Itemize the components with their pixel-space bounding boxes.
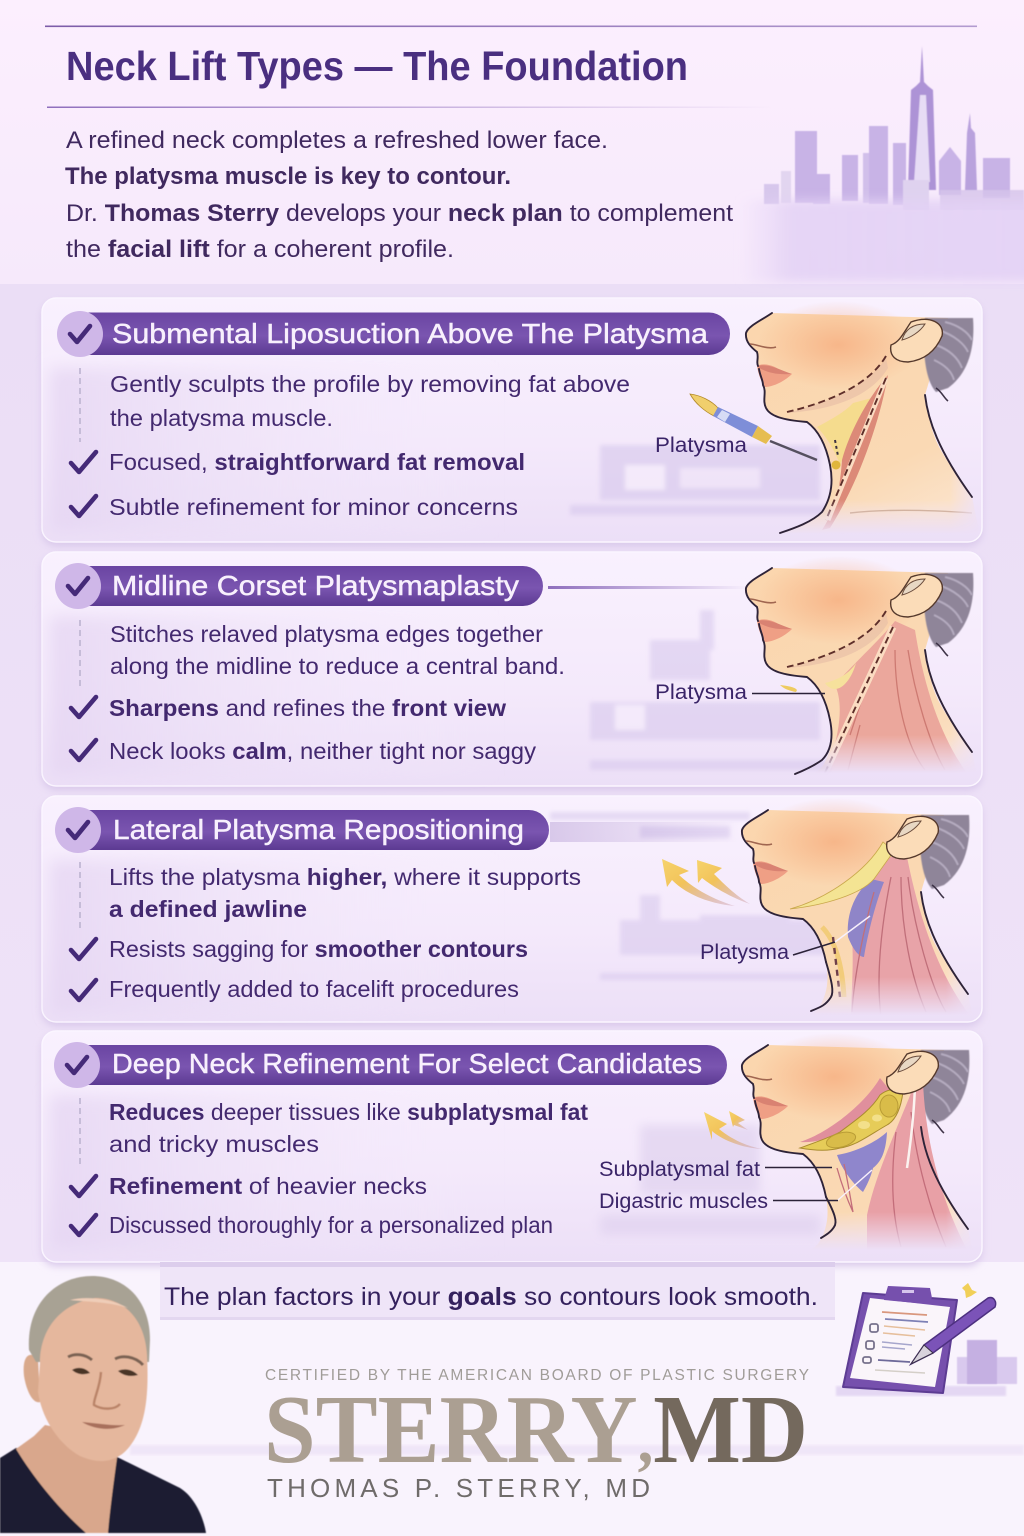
label: subplatysmal fat and digastric muscles bbox=[599, 1158, 872, 1213]
intro text: The platysma muscle is key to contour. bbox=[65, 163, 511, 190]
checklist: Refinement of heavier necks bbox=[109, 1173, 427, 1199]
label: platysma: Platysma bbox=[700, 941, 789, 964]
title: Neck Lift Types — The Foundation bbox=[66, 43, 688, 89]
label: subplatysmal fat and digastric muscles: Subplatysmal fat bbox=[599, 1158, 760, 1181]
logo wordmark: STERRY,MD bbox=[264, 1376, 808, 1484]
panel: submental liposuction bbox=[42, 298, 982, 546]
heading bar: Deep Neck Refinement For Select Candidates bbox=[112, 1048, 702, 1079]
checklist bbox=[71, 936, 528, 1002]
icon: lift arrows bbox=[704, 1111, 762, 1149]
intro text: Dr. Thomas Sterry develops your neck plan to complement bbox=[66, 200, 733, 227]
description: Gently sculpts the profile by removing fat above bbox=[110, 371, 630, 397]
label: subplatysmal fat and digastric muscles: Digastric muscles bbox=[599, 1190, 768, 1213]
checklist: Discussed thoroughly for a personalized plan bbox=[109, 1212, 553, 1238]
icon: cannula bbox=[690, 394, 817, 460]
doctor name: THOMAS P. STERRY, MD bbox=[267, 1473, 650, 1503]
checklist: Subtle refinement for minor concerns bbox=[109, 494, 518, 520]
illustration: neck with lateral lift bbox=[740, 802, 970, 1012]
illustration: neck with midline corset bbox=[746, 556, 980, 790]
heading bar: Lateral Platysma Repositioning bbox=[113, 814, 524, 845]
illustration: neck with liposuction cannula bbox=[690, 301, 980, 535]
description bbox=[80, 368, 630, 442]
description: along the midline to reduce a central band. bbox=[110, 653, 565, 679]
panel: deep neck refinement bbox=[42, 1031, 982, 1267]
description: a defined jawline bbox=[109, 896, 307, 922]
description bbox=[80, 862, 581, 930]
intro text bbox=[65, 127, 733, 263]
intro text: the facial lift for a coherent profile. bbox=[66, 236, 454, 263]
heading bar: Submental Liposuction Above The Platysma bbox=[112, 318, 708, 349]
header skyline bbox=[740, 46, 1024, 282]
icon: clipboard and pen bbox=[843, 1283, 1017, 1393]
checklist bbox=[71, 1173, 553, 1238]
footer panel bbox=[160, 1262, 1006, 1396]
description: and tricky muscles bbox=[109, 1131, 319, 1157]
description: Stitches relaved platysma edges together bbox=[110, 621, 543, 647]
checklist: Frequently added to facelift procedures bbox=[109, 976, 519, 1002]
checklist: Neck looks calm, neither tight nor saggy bbox=[109, 738, 536, 764]
heading bar: Midline Corset Platysmaplasty bbox=[112, 570, 519, 601]
heading bar bbox=[54, 1042, 727, 1088]
title rule bbox=[47, 106, 772, 108]
checklist: Resists sagging for smoother contours bbox=[109, 936, 528, 962]
heading bar bbox=[55, 807, 740, 853]
certification line: CERTIFIED BY THE AMERICAN BOARD OF PLASTIC SURGERY bbox=[265, 1367, 809, 1384]
label: platysma: Platysma bbox=[655, 681, 747, 704]
description: Reduces deeper tissues like subplatysmal fat bbox=[109, 1099, 588, 1125]
illustration: neck with subplatysmal fat bbox=[740, 1036, 970, 1247]
label: platysma bbox=[700, 916, 870, 964]
panel: lateral platysma repositioning bbox=[42, 796, 982, 1032]
icon: lift arrows bbox=[662, 859, 750, 906]
top rule bbox=[45, 26, 977, 27]
description: the platysma muscle. bbox=[110, 405, 333, 431]
panel: midline corset platysmaplasty bbox=[42, 552, 982, 790]
heading bar bbox=[57, 311, 730, 357]
doctor portrait bbox=[0, 1276, 206, 1533]
checklist: Sharpens and refines the front view bbox=[109, 695, 507, 721]
label: platysma bbox=[655, 681, 825, 704]
heading bar bbox=[55, 563, 748, 609]
label: platysma: Platysma bbox=[655, 434, 747, 457]
checklist: Focused, straightforward fat removal bbox=[109, 449, 525, 475]
checklist bbox=[71, 449, 525, 520]
description: Lifts the platysma higher, where it supports bbox=[109, 864, 581, 890]
intro text: A refined neck completes a refreshed lower face. bbox=[66, 127, 608, 154]
description bbox=[80, 1098, 588, 1166]
description bbox=[80, 620, 565, 690]
closing statement: The plan factors in your goals so contours look smooth. bbox=[164, 1283, 818, 1311]
checklist bbox=[71, 695, 536, 764]
